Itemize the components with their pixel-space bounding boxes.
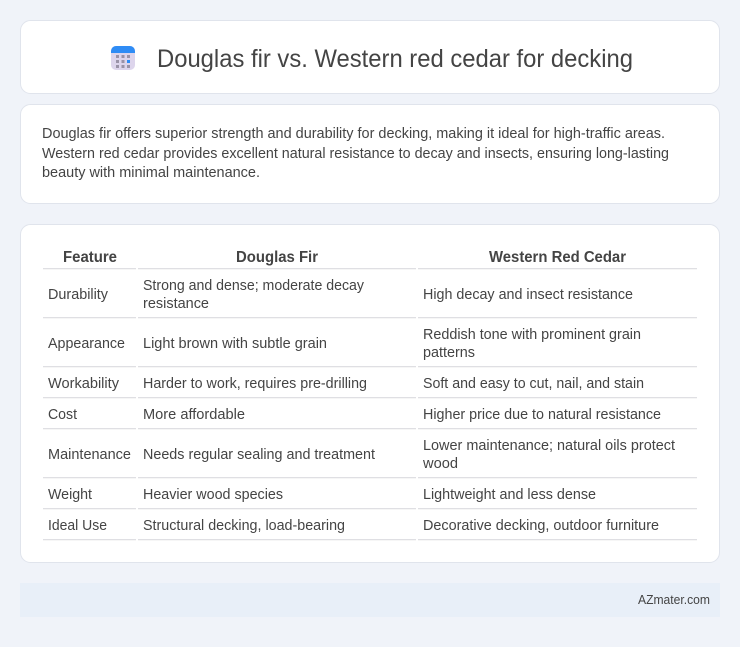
title: Douglas fir vs. Western red cedar for decking	[157, 45, 633, 73]
row: maintenance: Lower maintenance; natural oils protect	[423, 437, 676, 454]
row: appearance: Light brown with subtle grain	[143, 335, 327, 352]
row: workability: Workability	[48, 375, 119, 392]
row: appearance: Reddish tone with prominent grain	[423, 326, 641, 343]
row: maintenance: wood	[422, 455, 458, 472]
footer source text: AZmater.com	[638, 592, 710, 607]
row: ideal use: Structural decking, load-bearing	[143, 517, 345, 534]
panel: title header	[20, 20, 720, 94]
row: weight: Heavier wood species	[143, 486, 283, 503]
row: appearance: Appearance	[48, 335, 125, 352]
row: ideal use: Ideal Use	[48, 517, 107, 534]
icon: calendar	[111, 46, 135, 70]
intro text: Douglas fir offers superior strength and durability for decking, making it ideal for high-traffic areas.	[42, 125, 665, 142]
table header: Western Red Cedar	[489, 249, 626, 266]
row: durability: Durability	[48, 286, 108, 303]
panel: comparison table	[20, 224, 720, 562]
row: cost: Higher price due to natural resistance	[423, 406, 661, 423]
row: appearance	[48, 326, 641, 361]
row: maintenance: Maintenance	[48, 446, 131, 463]
row: workability	[48, 375, 644, 392]
table header: Feature	[63, 249, 117, 266]
row: maintenance	[48, 437, 676, 472]
row: weight: Weight	[48, 486, 93, 503]
table header	[63, 249, 626, 266]
row: appearance: patterns	[423, 344, 475, 361]
intro text: beauty with minimal maintenance.	[42, 164, 260, 181]
table header: Douglas Fir	[236, 249, 318, 266]
row: cost: More affordable	[143, 406, 245, 423]
row: durability: High decay and insect resistance	[423, 286, 633, 303]
panel: introduction	[20, 104, 720, 204]
panel: footer	[20, 583, 720, 617]
row: maintenance: Needs regular sealing and treatment	[143, 446, 376, 463]
row: durability: resistance	[143, 295, 209, 312]
row: weight: Lightweight and less dense	[423, 486, 596, 503]
intro text	[42, 125, 669, 181]
row: workability: Soft and easy to cut, nail, and stain	[423, 375, 644, 392]
row: cost	[48, 406, 661, 423]
row: cost: Cost	[48, 406, 78, 423]
row: ideal use: Decorative decking, outdoor furniture	[423, 517, 659, 534]
row: ideal use	[48, 517, 659, 534]
row: workability: Harder to work, requires pre-drilling	[143, 375, 367, 392]
row: weight	[48, 486, 596, 503]
row: durability	[48, 277, 633, 312]
intro text: Western red cedar provides excellent natural resistance to decay and insects, ensuring long-lasting	[42, 145, 669, 162]
row: durability: Strong and dense; moderate decay	[143, 277, 364, 294]
